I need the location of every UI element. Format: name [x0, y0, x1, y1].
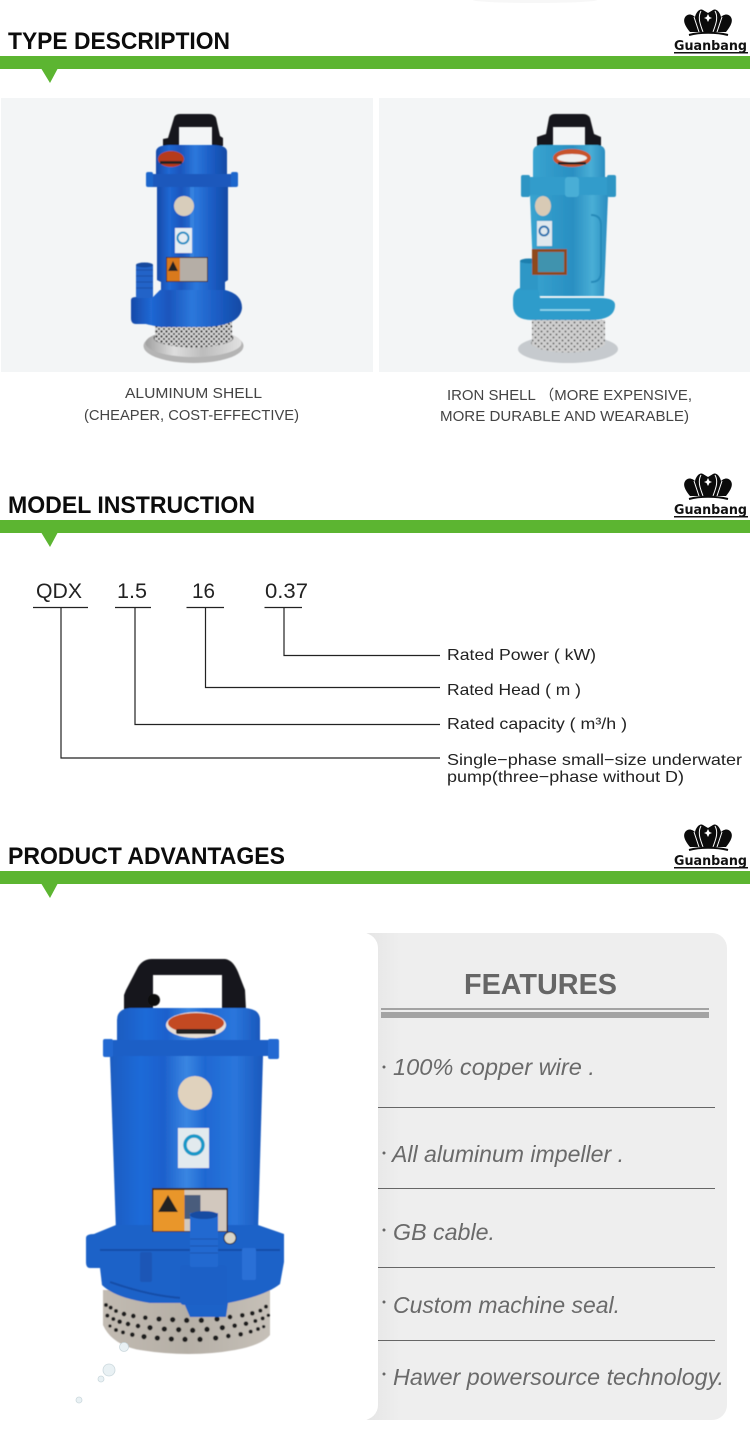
heading: features: FEATURES — [464, 969, 617, 1001]
logo: Guanbang: Guanbang — [674, 854, 747, 869]
section header: model instruction — [0, 473, 750, 547]
panel: iron shell photo — [379, 98, 750, 372]
feature: cable — [378, 1219, 715, 1268]
caption: aluminum shell — [84, 386, 299, 424]
logo: Guanbang: Guanbang — [674, 503, 747, 518]
caption: aluminum shell: (CHEAPER, COST-EFFECTIVE) — [84, 408, 299, 424]
pump: aluminum shell — [131, 114, 244, 363]
model code legend: Rated capacity ( m³/h ) — [447, 716, 627, 733]
feature: copper wire: 100% copper wire . — [393, 1054, 595, 1080]
model code diagram — [33, 580, 743, 786]
logo: Guanbang — [674, 473, 748, 518]
heading: product advantages: PRODUCT ADVANTAGES — [8, 843, 285, 870]
model code segments: QDX — [36, 580, 82, 603]
caption: aluminum shell: ALUMINUM SHELL — [125, 386, 262, 402]
heading rule — [381, 1008, 709, 1018]
pump: iron shell — [513, 114, 618, 363]
model code segments: 0.37 — [265, 580, 308, 603]
feature: power source: Hawer powersource technology. — [393, 1364, 724, 1390]
feature: machine seal — [378, 1292, 715, 1341]
heading: type description: TYPE DESCRIPTION — [8, 28, 230, 55]
caption: iron shell — [440, 387, 692, 425]
model code legend: pump(three−phase without D) — [447, 769, 684, 786]
pump: large photo — [86, 959, 284, 1354]
model code legend: Single−phase small−size underwater — [447, 752, 743, 769]
model code legend: Rated Head ( m ) — [447, 682, 581, 699]
logo: Guanbang: Guanbang — [674, 39, 747, 54]
heading: model instruction: MODEL INSTRUCTION — [8, 492, 255, 519]
model code legend: Rated Power ( kW) — [447, 647, 596, 664]
panel: features — [355, 933, 727, 1420]
model code segments — [36, 580, 308, 603]
leader lines — [33, 608, 440, 758]
green bar with pointer — [0, 56, 750, 83]
model code segments: 1.5 — [117, 580, 147, 603]
feature: machine seal: Custom machine seal. — [393, 1292, 620, 1318]
feature: cable: GB cable. — [393, 1219, 495, 1245]
caption: iron shell: IRON SHELL （MORE EXPENSIVE, — [447, 387, 692, 404]
caption: iron shell: MORE DURABLE AND WEARABLE) — [440, 409, 689, 425]
section header: type description — [0, 9, 750, 83]
panel: aluminum shell photo — [1, 98, 373, 372]
model code segments: 16 — [192, 580, 215, 603]
feature: impeller: All aluminum impeller . — [390, 1141, 624, 1167]
feature: impeller — [378, 1141, 715, 1189]
model code legend — [447, 647, 743, 786]
water droplets — [76, 1342, 128, 1403]
panel: pump photo card — [18, 933, 378, 1420]
feature: copper wire — [378, 1054, 715, 1108]
section header: product advantages — [0, 824, 750, 898]
green bar with pointer — [0, 520, 750, 547]
logo: Guanbang — [674, 824, 748, 869]
green bar with pointer — [0, 871, 750, 898]
logo: Guanbang — [674, 9, 748, 54]
